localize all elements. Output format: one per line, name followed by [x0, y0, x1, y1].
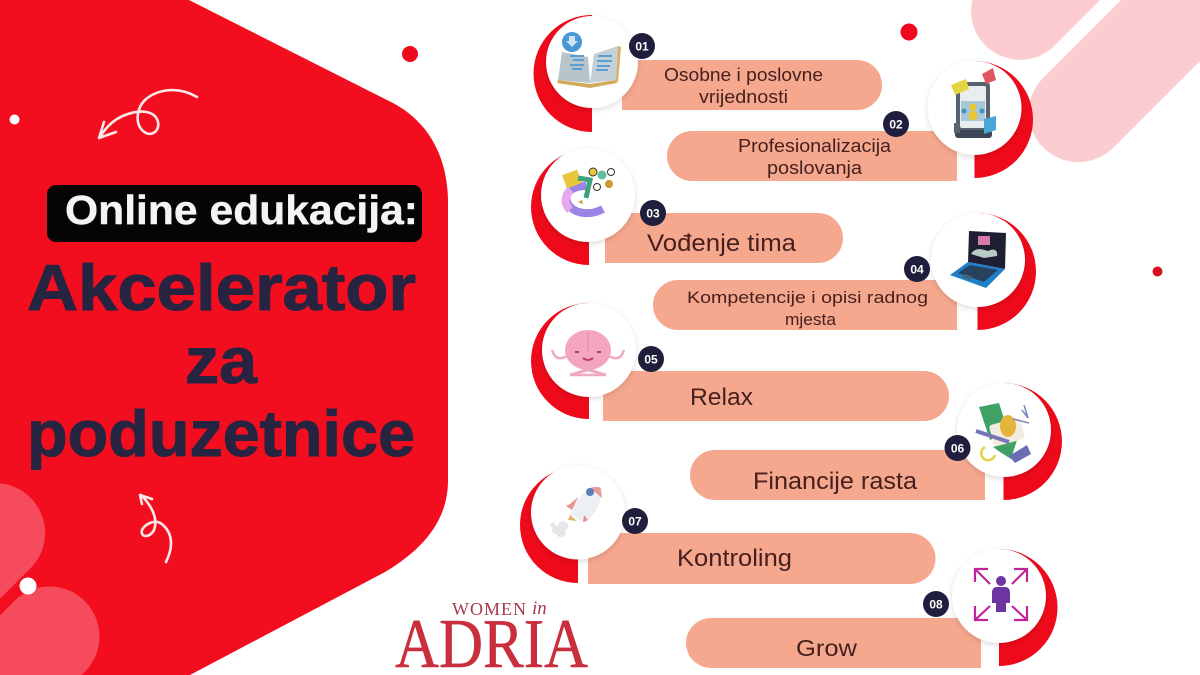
badge 01 — [629, 33, 655, 59]
item 05: Relax: Relax — [690, 384, 753, 411]
icon: phone with social badges — [951, 68, 996, 138]
badge 08 — [923, 591, 949, 617]
item 06: Financije rasta — [690, 383, 1062, 500]
badge 04: 04 — [910, 262, 924, 276]
item 04: Kompetencije i opisi radnog mjesta: Kompetencije i opisi radnog — [687, 288, 928, 307]
item 08: Grow — [686, 549, 1058, 668]
decorative pink shape bottom left: upper bar — [0, 483, 45, 599]
item 07: Kontroling — [520, 466, 936, 584]
badge 04 — [904, 256, 930, 282]
badge 07 — [622, 508, 648, 534]
item 01: Osobne i poslovne vrijednosti: vrijednosti — [699, 87, 788, 107]
icon: magnet with figure — [562, 168, 614, 213]
item 07: Kontroling: Kontroling — [677, 545, 792, 572]
item 04: Kompetencije i opisi radnog mjesta — [653, 213, 1036, 330]
icon: laptop — [950, 231, 1006, 288]
icon: money and finance — [976, 403, 1031, 463]
item 02: Profesionalizacija poslovanja: Profesionalizacija — [738, 136, 892, 156]
badge 01: 01 — [635, 40, 649, 54]
heading: Akcelerator za poduzetnice — [27, 251, 416, 470]
item 01: Osobne i poslovne vrijednosti: Osobne i poslovne — [664, 65, 823, 85]
item 06: Financije rasta: Financije rasta — [753, 468, 918, 495]
item 01: Osobne i poslovne vrijednosti — [534, 15, 882, 132]
decorative pink shape bottom left: lower bar — [0, 586, 99, 675]
logo: Women in Adria: in — [532, 598, 547, 619]
decorative pink shape top right: lower bar — [1029, 0, 1200, 162]
arrow: curly bottom arrow — [140, 495, 171, 562]
badge 07: 07 — [628, 514, 642, 528]
item 03: Vođenje tima: Vođenje tima — [647, 230, 797, 257]
icon: person with expanding arrows — [975, 569, 1027, 620]
icon: rocket — [550, 487, 602, 538]
decorative pink shape top right: upper bar — [971, 0, 1100, 60]
item 04: Kompetencije i opisi radnog mjesta: mjesta — [785, 310, 837, 329]
badge 02: 02 — [889, 118, 903, 132]
title badge: Online edukacija: Online edukacija: — [65, 187, 418, 233]
icon: meditating brain — [552, 330, 624, 375]
item 08: Grow: Grow — [796, 635, 857, 661]
badge 05 — [638, 346, 664, 372]
badge 03: 03 — [646, 206, 660, 220]
badge 02 — [883, 111, 909, 137]
item 02: Profesionalizacija poslovanja: poslovanja — [767, 158, 863, 178]
badge 06 — [944, 435, 970, 461]
logo: Women in Adria: WOMEN — [452, 599, 527, 619]
left red panel — [0, 0, 448, 675]
item 02: Profesionalizacija poslovanja — [667, 61, 1033, 181]
item 05: Relax — [531, 303, 949, 421]
heading: Akcelerator za poduzetnice: Akcelerator — [27, 251, 416, 324]
badge 08: 08 — [929, 598, 943, 612]
item 03: Vođenje tima — [531, 148, 843, 265]
badge 06: 06 — [951, 442, 964, 456]
icon: open book — [557, 32, 621, 88]
badge 03 — [640, 200, 666, 226]
heading: Akcelerator za poduzetnice: za — [185, 324, 258, 397]
heading: Akcelerator za poduzetnice: poduzetnice — [27, 397, 415, 470]
arrow: curly top arrow — [99, 90, 197, 138]
badge 05: 05 — [644, 352, 658, 366]
